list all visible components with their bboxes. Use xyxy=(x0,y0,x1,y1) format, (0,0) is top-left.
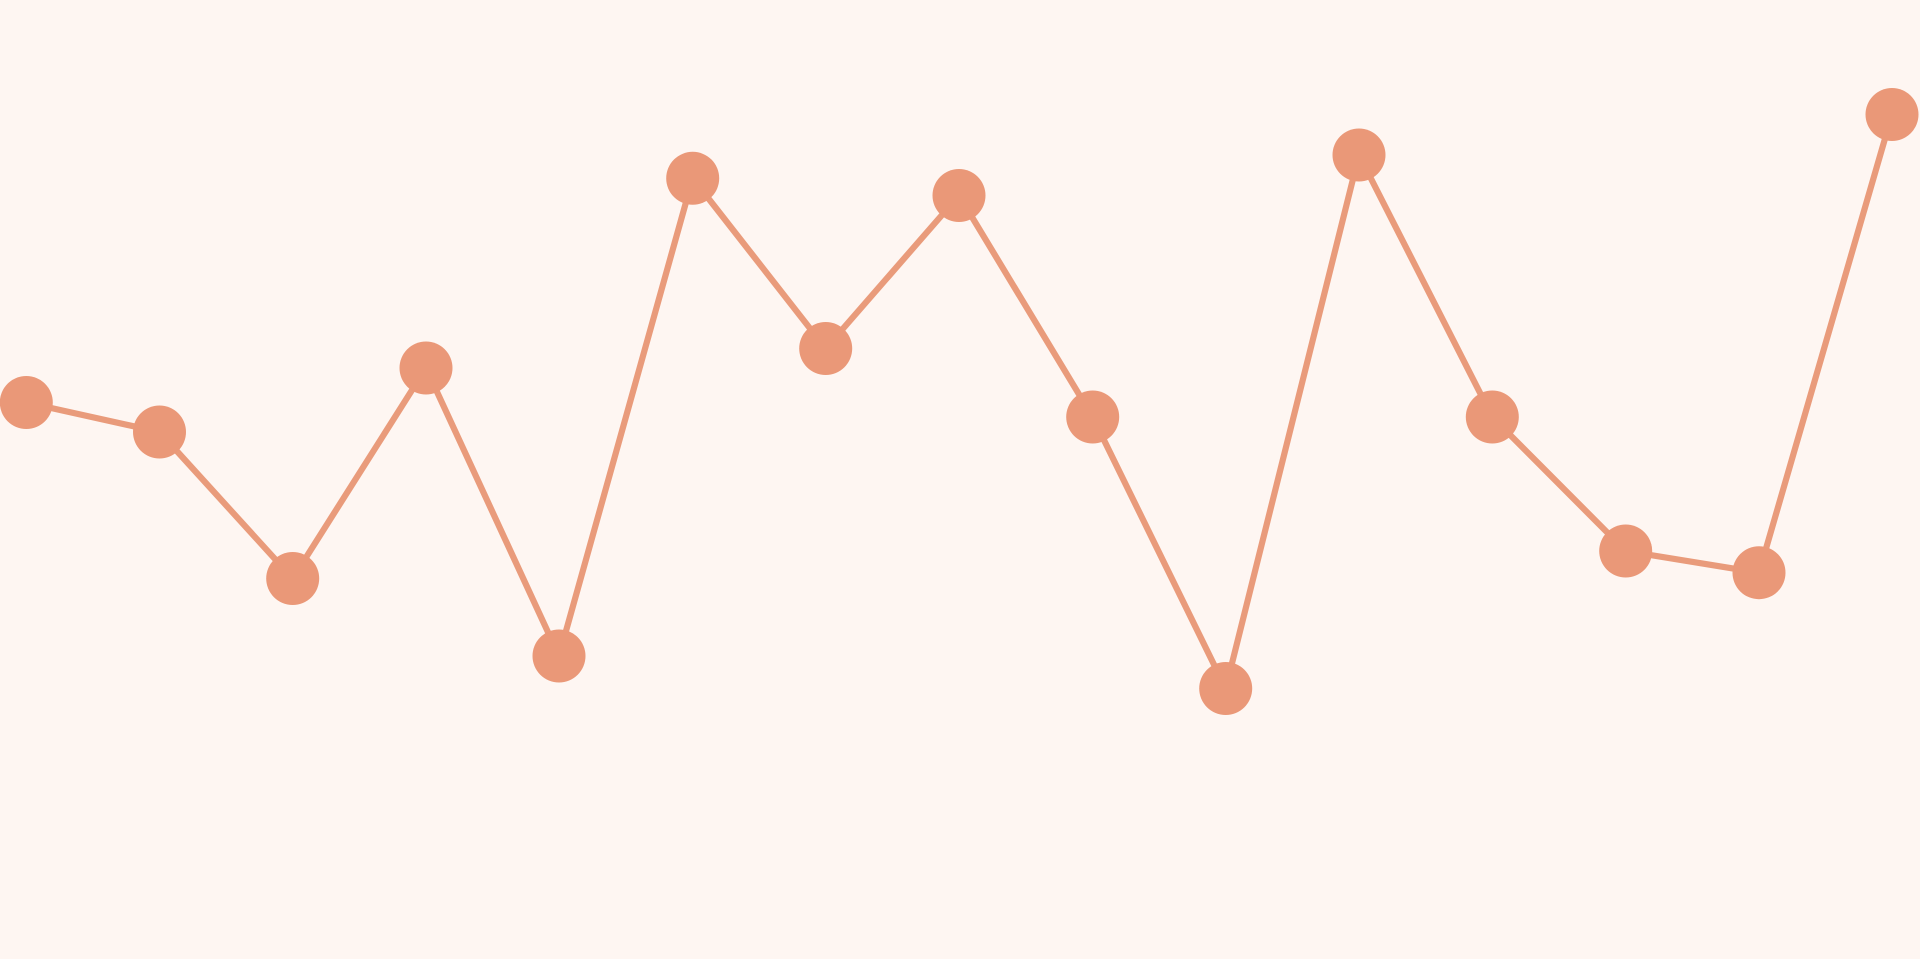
data line xyxy=(26,114,1892,688)
data points xyxy=(0,88,1918,715)
